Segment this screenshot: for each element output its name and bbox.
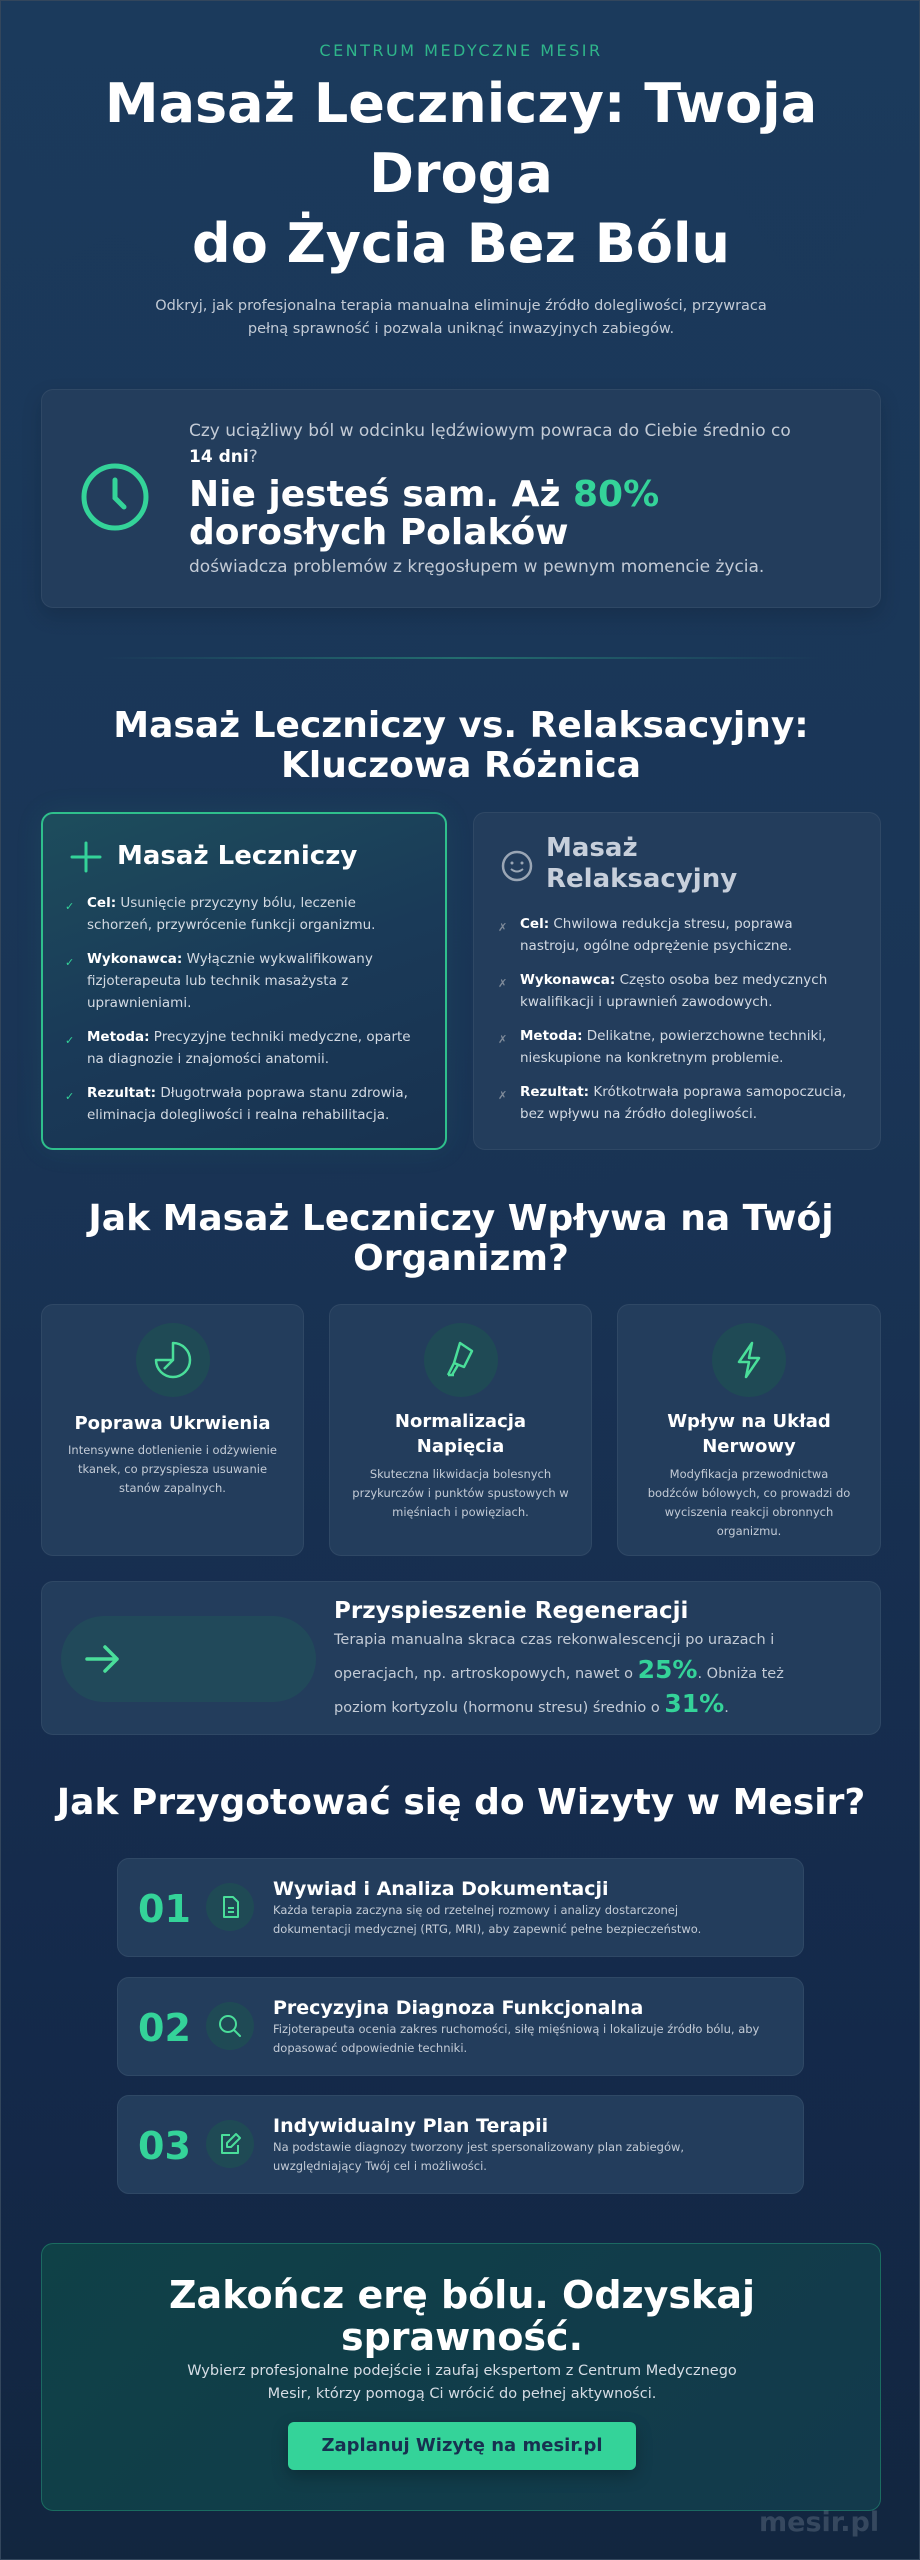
heading: comparison: Masaż Leczniczy vs. Relaksacyjny:: [113, 705, 809, 746]
panel: regeneration: [41, 1581, 881, 1735]
stat text: Czy uciążliwy ból w odcinku lędźwiowym powraca do Ciebie średnio co 14 dni?: [189, 421, 791, 467]
list: [498, 916, 846, 1122]
panel: call to action: [41, 2243, 881, 2511]
panel: tension: Napięcia: [417, 1436, 504, 1457]
cta heading: sprawność.: [341, 2315, 583, 2359]
icon: clock: [82, 464, 148, 530]
title: [105, 72, 817, 275]
panel: tension: Normalizacja: [395, 1411, 526, 1432]
icon: smiley: [502, 850, 532, 882]
list: Wykonawca: Wyłącznie wykwalifikowany fizjoterapeuta lub technik masażysta z uprawnieniami.: [87, 951, 373, 1011]
step 3: Na podstawie diagnozy tworzony jest spersonalizowany plan zabiegów, uwzględniający Twój cel i możliwości.: [273, 2140, 684, 2173]
regeneration text: Przyspieszenie Regeneracji: [334, 1598, 688, 1624]
step 3: 03: [138, 2124, 191, 2168]
stat text: dorosłych Polaków: [189, 512, 568, 553]
watermark: mesir.pl: [759, 2507, 879, 2538]
step 1: [117, 1858, 804, 1957]
list: Metoda: Delikatne, powierzchowne techniki, nieskupione na konkretnym problemie.: [520, 1028, 826, 1066]
subtitle: Odkryj, jak profesjonalna terapia manualna eliminuje źródło dolegliwości, przywraca pełną sprawność i pozwala uniknąć inwazyjnych zabiegów.: [155, 298, 767, 337]
brand label: CENTRUM MEDYCZNE MESIR: [319, 41, 603, 60]
heading: effects: [86, 1198, 834, 1279]
stat text: [189, 421, 791, 577]
list: ✓: [65, 900, 74, 913]
icon: leaf: [136, 1323, 210, 1397]
step 2: Precyzyjna Diagnoza Funkcjonalna: [273, 1997, 643, 2019]
stat text: doświadcza problemów z kręgosłupem w pewnym momencie życia.: [189, 557, 764, 577]
heading: comparison: Kluczowa Różnica: [281, 745, 641, 786]
panel: nervous system: [617, 1304, 881, 1556]
list: Wykonawca: Często osoba bez medycznych kwalifikacji i uprawnień zawodowych.: [520, 972, 827, 1010]
heading: comparison: [113, 705, 809, 786]
list: ✗: [498, 1089, 507, 1102]
step 2: Fizjoterapeuta ocenia zakres ruchomości, siłę mięśniową i lokalizuje źródło bólu, aby dopasować odpowiednie techniki.: [273, 2022, 759, 2055]
heading: Relaksacyjny: [546, 864, 737, 894]
list: Cel: Usunięcie przyczyny bólu, leczenie schorzeń, przywrócenie funkcji organizmu.: [87, 895, 375, 933]
step 2: [117, 1977, 804, 2076]
panel: relaxation massage: [473, 812, 881, 1150]
title: Droga: [369, 142, 553, 205]
step 1: 01: [138, 1887, 191, 1931]
panel: nervous system: Wpływ na Układ: [667, 1411, 831, 1432]
icon: edit: [206, 2120, 254, 2168]
cta button: Zaplanuj Wizytę na mesir.pl: [321, 2435, 603, 2456]
list: ✓: [65, 1090, 74, 1103]
panel: tension: Skuteczna likwidacja bolesnych przykurczów i punktów spustowych w mięśniach i powięziach.: [352, 1467, 569, 1519]
icon: tool: [424, 1323, 498, 1397]
list: ✓: [65, 1034, 74, 1047]
list: Rezultat: Długotrwała poprawa stanu zdrowia, eliminacja dolegliwości i realna rehabilitacja.: [87, 1085, 408, 1123]
list: ✓: [65, 956, 74, 969]
step 3: Indywidualny Plan Terapii: [273, 2115, 548, 2137]
heading: effects: Organizm?: [353, 1238, 569, 1279]
panel: therapeutic massage: [41, 812, 447, 1150]
cta button: [288, 2422, 636, 2470]
list: ✗: [498, 1033, 507, 1046]
heading: [546, 833, 737, 894]
panel: nervous system: Nerwowy: [702, 1436, 796, 1457]
icon: search: [206, 2002, 254, 2050]
list: Cel: Chwilowa redukcja stresu, poprawa nastroju, ogólne odprężenie psychiczne.: [520, 916, 793, 954]
icon: document: [206, 1883, 254, 1931]
icon: arrow pill: [61, 1616, 316, 1702]
title: do Życia Bez Bólu: [192, 212, 730, 275]
icon: plus: [70, 842, 102, 872]
panel: nervous system: Modyfikacja przewodnictwa bodźców bólowych, co prowadzi do wyciszenia reakcji obronnych organizmu.: [648, 1467, 850, 1538]
heading: Masaż: [546, 833, 638, 863]
panel: tension: [329, 1304, 592, 1556]
regeneration text: Terapia manualna skraca czas rekonwalescencji po urazach i operacjach, np. artroskopowych, nawet o 25%. Obniża też poziom kortyzolu (hormonu stresu) średnio o 31%.: [334, 1632, 784, 1718]
cta heading: Zakończ erę bólu. Odzyskaj: [169, 2273, 755, 2317]
cta text: Wybierz profesjonalne podejście i zaufaj ekspertom z Centrum Medycznego Mesir, którzy pomogą Ci wrócić do pełnej aktywności.: [187, 2363, 737, 2402]
list: Metoda: Precyzyjne techniki medyczne, oparte na diagnozie i znajomości anatomii.: [87, 1029, 411, 1067]
step 2: 02: [138, 2006, 191, 2050]
list: [65, 895, 411, 1123]
icon: lightning: [712, 1323, 786, 1397]
panel: statistic: [41, 389, 881, 608]
list: Rezultat: Krótkotrwała poprawa samopoczucia, bez wpływu na źródło dolegliwości.: [520, 1084, 846, 1122]
panel: blood flow: [41, 1304, 304, 1556]
step 1: Wywiad i Analiza Dokumentacji: [273, 1878, 609, 1900]
panel: blood flow: Intensywne dotlenienie i odżywienie tkanek, co przyspiesza usuwanie stanów zapalnych.: [68, 1443, 277, 1495]
heading: preparation: Jak Przygotować się do Wizyty w Mesir?: [57, 1782, 865, 1823]
heading: Masaż Leczniczy: [117, 841, 357, 871]
cta heading: [169, 2273, 755, 2359]
list: ✗: [498, 921, 507, 934]
title: Masaż Leczniczy: Twoja: [105, 72, 817, 135]
heading: effects: Jak Masaż Leczniczy Wpływa na Twój: [88, 1198, 834, 1239]
step 3: [117, 2095, 804, 2194]
step 1: Każda terapia zaczyna się od rzetelnej rozmowy i analizy dostarczonej dokumentacji medycznej (RTG, MRI), aby zapewnić pełne bezpieczeństwo.: [273, 1903, 701, 1936]
panel: blood flow: Poprawa Ukrwienia: [74, 1413, 271, 1434]
list: ✗: [498, 977, 507, 990]
stat text: Nie jesteś sam. Aż 80%: [189, 474, 659, 515]
